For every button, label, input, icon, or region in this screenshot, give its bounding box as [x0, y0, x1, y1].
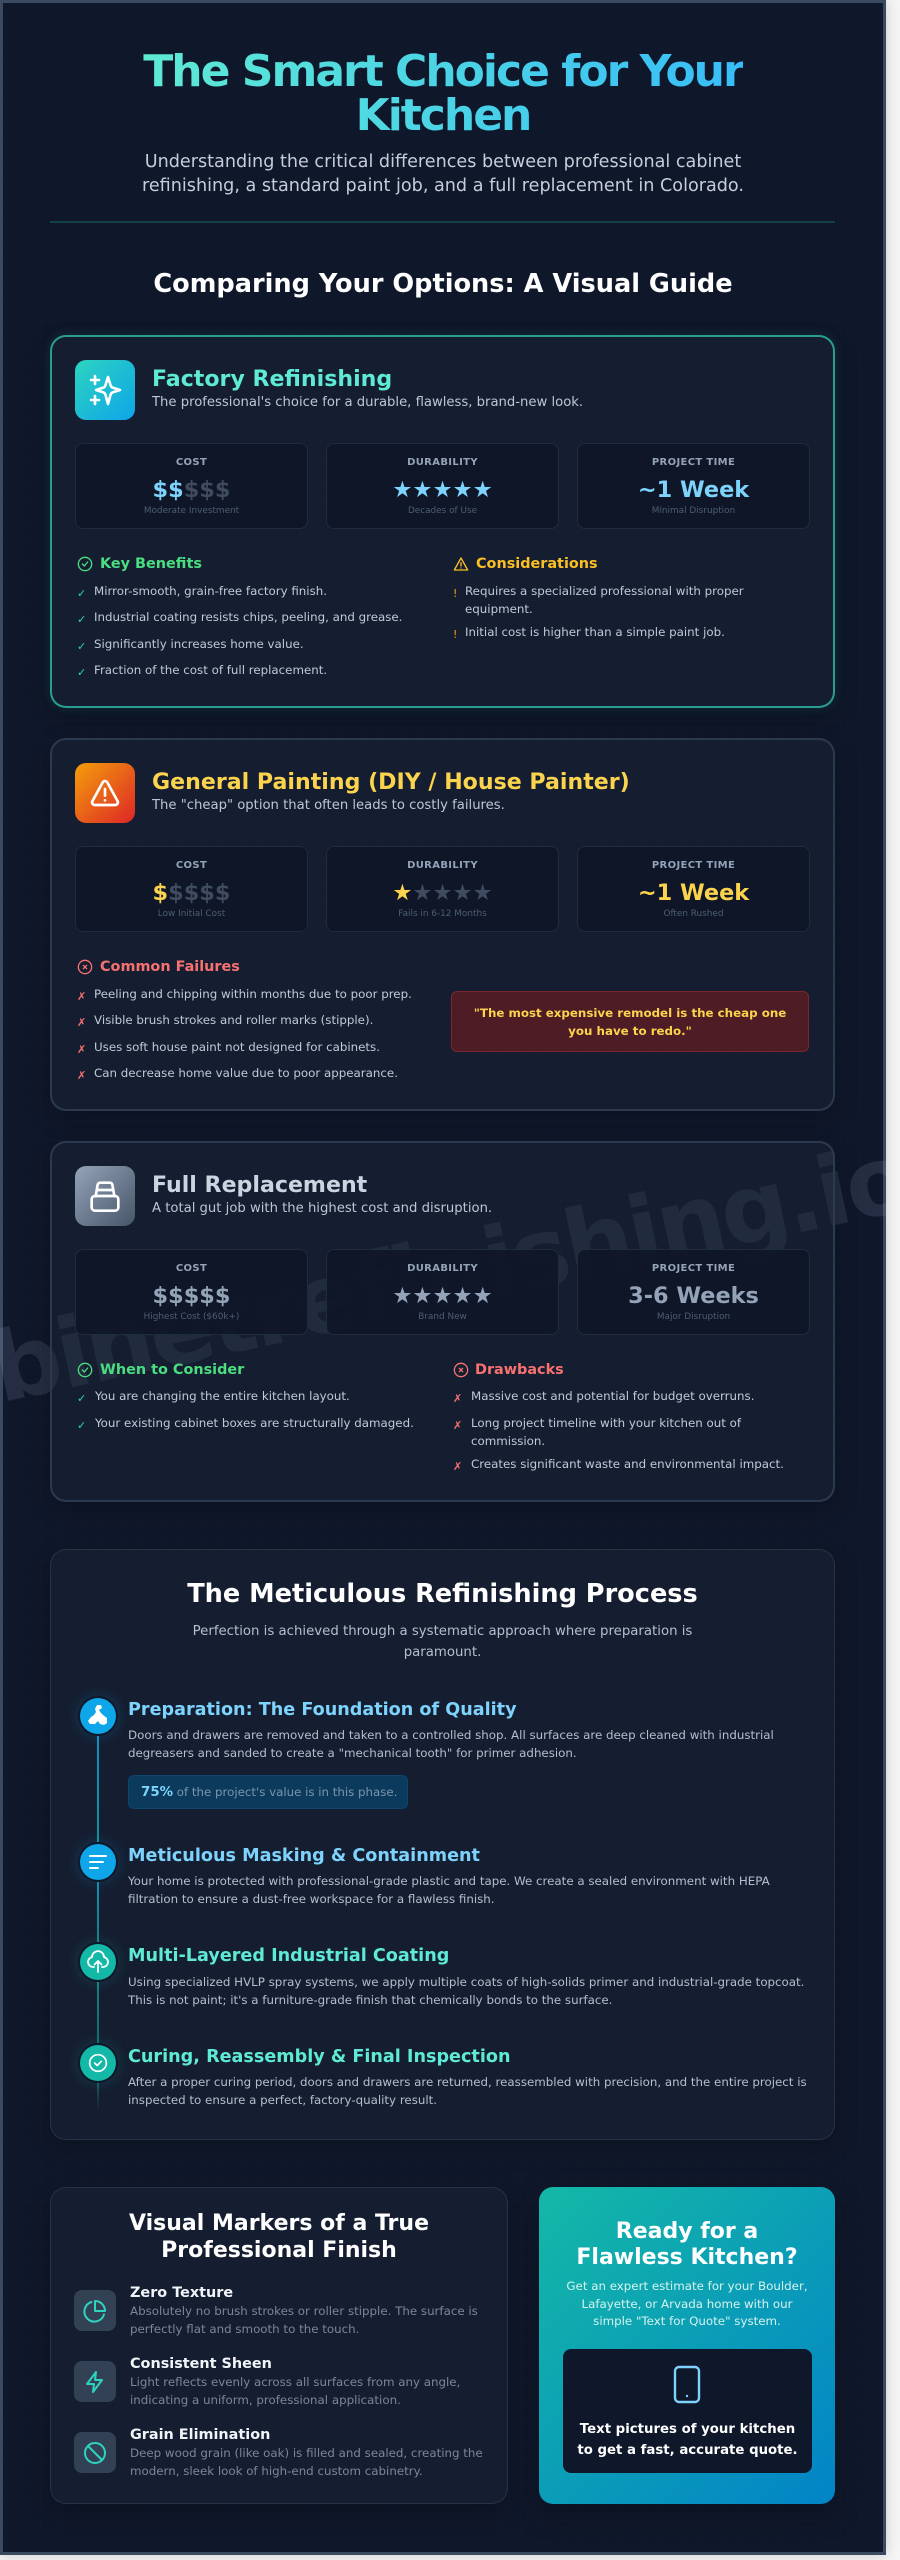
stat: durability: [326, 1249, 559, 1335]
marker: consistent sheen: [74, 2356, 460, 2407]
marker text: indicating a uniform, professional application.: [130, 2393, 401, 2407]
list: when to consider: ✓: [77, 1419, 86, 1432]
card title: Full Replacement: [152, 1172, 367, 1198]
stat: durability: [326, 443, 559, 529]
marker text: Light reflects evenly across all surfaces from any angle,: [130, 2375, 460, 2389]
step 3 title: Multi-Layered Industrial Coating: [128, 1946, 449, 1966]
list: common failures: [77, 987, 412, 1082]
step 3 text: [128, 1975, 804, 2007]
list: drawbacks: ✗: [453, 1392, 462, 1405]
stat: project time: [577, 1249, 810, 1335]
icon: pie chart: [74, 2290, 116, 2331]
section heading: Comparing Your Options: A Visual Guide: [153, 269, 733, 299]
panel: visual markers: [50, 2187, 508, 2504]
title: [143, 46, 743, 141]
stat: cost: COST: [176, 1263, 207, 1274]
stat: cost: [75, 846, 308, 932]
timeline connector 1: [97, 1736, 99, 1842]
cta text: simple "Text for Quote" system.: [593, 2314, 781, 2328]
markers heading: Professional Finish: [161, 2238, 397, 2263]
step 2 title: Meticulous Masking & Containment: [128, 1846, 480, 1866]
list: when to consider: [77, 1389, 414, 1432]
marker title: Grain Elimination: [130, 2427, 270, 2443]
list: considerations: [453, 584, 744, 641]
process intro: Perfection is achieved through a systematic approach where preparation is: [193, 1624, 692, 1639]
icon: jar: [75, 1166, 135, 1226]
heading: drawbacks: Drawbacks: [475, 1362, 564, 1378]
step 2 text: filtration to ensure a dust-free workspace for a flawless finish.: [128, 1892, 495, 1906]
stat: project time: 3-6 Weeks: [628, 1283, 759, 1309]
stat: cost: COST: [176, 860, 207, 871]
stat: project time: ~1 Week: [638, 880, 749, 906]
process intro: paramount.: [404, 1645, 481, 1660]
step 4 text: After a proper curing period, doors and drawers are returned, reassembled with precision, and the entire project is: [128, 2075, 807, 2089]
list: considerations: equipment.: [465, 602, 533, 616]
panel: refinishing process: [50, 1549, 835, 2140]
list: drawbacks: Creates significant waste and environmental impact.: [471, 1457, 784, 1471]
heading: when to consider: When to Consider: [100, 1362, 244, 1378]
cta text: [566, 2279, 808, 2328]
panel: factory refinishing: [50, 335, 835, 708]
stat: project time: PROJECT TIME: [652, 457, 735, 468]
list: key benefits: ✓: [77, 587, 86, 600]
stat: cost: $$$$$: [153, 1283, 230, 1309]
list: common failures: Visible brush strokes and roller marks (stipple).: [94, 1013, 373, 1027]
list: considerations: Requires a specialized professional with proper: [465, 584, 744, 598]
list: key benefits: Industrial coating resists chips, peeling, and grease.: [94, 610, 402, 624]
marker: zero texture: [74, 2285, 478, 2336]
timeline connector 2: [97, 1882, 99, 1943]
list: when to consider: Your existing cabinet boxes are structurally damaged.: [95, 1416, 414, 1430]
stat: project time: Minimal Disruption: [652, 506, 735, 516]
step 2 text: Your home is protected with professional-grade plastic and tape. We create a sealed environment with HEPA: [128, 1874, 770, 1888]
subtitle: [142, 152, 744, 196]
step 4 icon: [80, 2045, 116, 2081]
heading: common failures: Common Failures: [100, 959, 240, 975]
process heading: The Meticulous Refinishing Process: [187, 1579, 698, 1609]
stat: durability: [326, 846, 559, 932]
list: common failures: ✗: [77, 1043, 86, 1056]
stat: durability: ★★★★★: [392, 1283, 493, 1309]
timeline connector 3: [97, 1982, 99, 2044]
list: drawbacks: Massive cost and potential for budget overruns.: [471, 1389, 754, 1403]
list: considerations: !: [453, 628, 457, 641]
stat: durability: ★★★★★: [392, 880, 493, 906]
list: when to consider: You are changing the entire kitchen layout.: [95, 1389, 350, 1403]
stat: durability: Fails in 6-12 Months: [398, 909, 487, 919]
list: drawbacks: Long project timeline with your kitchen out of: [471, 1416, 741, 1430]
list: considerations: Initial cost is higher than a simple paint job.: [465, 625, 725, 639]
step 4 text: [128, 2075, 807, 2107]
step 1 icon: [80, 1698, 116, 1734]
step 1 badge: [128, 1775, 408, 1809]
card subtitle: The "cheap" option that often leads to costly failures.: [152, 798, 505, 813]
stat: project time: PROJECT TIME: [652, 860, 735, 871]
step 2 text: [128, 1874, 770, 1906]
icon: sparkles: [75, 360, 135, 420]
stat: cost: Moderate Investment: [144, 506, 239, 516]
stat: project time: ~1 Week: [638, 477, 749, 503]
marker text: [130, 2375, 460, 2407]
marker text: [130, 2446, 483, 2478]
card subtitle: A total gut job with the highest cost and disruption.: [152, 1201, 492, 1216]
list: key benefits: [77, 584, 402, 679]
step 1: [74, 1692, 774, 1809]
stat: project time: Major Disruption: [657, 1312, 730, 1322]
timeline connector 4: [97, 2083, 99, 2110]
marker title: Zero Texture: [130, 2285, 233, 2301]
stat: project time: [577, 846, 810, 932]
marker title: Consistent Sheen: [130, 2356, 272, 2372]
step 3: [75, 1939, 804, 2007]
callout: quote: you have to redo.": [568, 1024, 692, 1038]
cta heading: Flawless Kitchen?: [576, 2245, 798, 2270]
marker text: modern, sleek look of high-end custom cabinetry.: [130, 2464, 423, 2478]
cta heading: [576, 2219, 798, 2270]
markers heading: [129, 2211, 429, 2263]
title: Kitchen: [356, 90, 530, 141]
stat: project time: PROJECT TIME: [652, 1263, 735, 1274]
icon: lightning: [74, 2361, 116, 2402]
title: The Smart Choice for Your: [143, 46, 743, 97]
icon: ban: [74, 2432, 116, 2473]
list: common failures: ✗: [77, 990, 86, 1003]
cta box text: [577, 2422, 798, 2458]
step 3 icon: [80, 1944, 116, 1980]
marker text: Absolutely no brush strokes or roller stipple. The surface is: [130, 2304, 478, 2318]
stat: cost: [75, 443, 308, 529]
list: key benefits: Mirror-smooth, grain-free factory finish.: [94, 584, 327, 598]
cta box text: to get a fast, accurate quote.: [577, 2443, 798, 2458]
step 3 text: Using specialized HVLP spray systems, we apply multiple coats of high-solids primer and industrial-grade topcoat.: [128, 1975, 804, 1989]
stat: cost: COST: [176, 457, 207, 468]
markers heading: Visual Markers of a True: [129, 2211, 429, 2236]
step 1 badge: 75% of the project's value is in this phase.: [141, 1785, 397, 1800]
list: when to consider: ✓: [77, 1392, 86, 1405]
heading: considerations: Considerations: [476, 556, 598, 572]
marker text: Deep wood grain (like oak) is filled and sealed, creating the: [130, 2446, 483, 2460]
cta box text: Text pictures of your kitchen: [580, 2422, 795, 2437]
callout: quote: "The most expensive remodel is the cheap one: [474, 1006, 786, 1020]
panel: general painting: [50, 738, 835, 1111]
stat: durability: DURABILITY: [407, 457, 478, 468]
step 2: [74, 1838, 770, 1906]
cta quote box: [563, 2349, 812, 2473]
list: drawbacks: ✗: [453, 1419, 462, 1432]
marker text: perfectly flat and smooth to the touch.: [130, 2322, 359, 2336]
stat: durability: Brand New: [418, 1312, 467, 1322]
callout: quote: [451, 991, 809, 1052]
stat: durability: DURABILITY: [407, 1263, 478, 1274]
list: common failures: ✗: [77, 1016, 86, 1029]
stat: cost: $$$$$: [153, 477, 230, 503]
list: drawbacks: [453, 1389, 784, 1473]
step 4 title: Curing, Reassembly & Final Inspection: [128, 2047, 510, 2067]
list: key benefits: ✓: [77, 666, 86, 679]
step 4: [75, 2040, 807, 2107]
list: key benefits: ✓: [77, 613, 86, 626]
card subtitle: The professional's choice for a durable, flawless, brand-new look.: [152, 395, 583, 410]
cta heading: Ready for a: [616, 2219, 758, 2244]
list: common failures: Can decrease home value due to poor appearance.: [94, 1066, 398, 1080]
list: key benefits: Fraction of the cost of full replacement.: [94, 663, 327, 677]
icon: phone: [674, 2366, 700, 2404]
step 1 title: Preparation: The Foundation of Quality: [128, 1700, 517, 1720]
list: drawbacks: ✗: [453, 1460, 462, 1473]
stat: cost: Highest Cost ($60k+): [144, 1312, 239, 1322]
step 1 text: Doors and drawers are removed and taken to a controlled shop. All surfaces are deep cleaned with industrial: [128, 1728, 774, 1742]
list: considerations: !: [453, 587, 457, 600]
marker text: [130, 2304, 478, 2336]
marker: grain elimination: [74, 2427, 483, 2478]
icon: warning triangle: [75, 763, 135, 823]
subtitle: Understanding the critical differences between professional cabinet: [145, 152, 741, 172]
list: common failures: Peeling and chipping within months due to poor prep.: [94, 987, 412, 1001]
cta text: Get an expert estimate for your Boulder,: [566, 2279, 808, 2293]
list: key benefits: ✓: [77, 640, 86, 653]
subtitle: refinishing, a standard paint job, and a full replacement in Colorado.: [142, 176, 744, 196]
process intro: [193, 1624, 692, 1660]
heading: key benefits: Key Benefits: [100, 556, 202, 572]
step 1 text: [128, 1728, 774, 1760]
panel: call to action: [539, 2187, 835, 2504]
stat: durability: Decades of Use: [408, 506, 477, 516]
step 1 text: degreasers and sanded to create a "mechanical tooth" for primer adhesion.: [128, 1746, 577, 1760]
stat: cost: $$$$$: [153, 880, 230, 906]
panel: full replacement: [50, 1141, 835, 1502]
stat: project time: Often Rushed: [663, 909, 724, 919]
stat: durability: ★★★★★: [392, 477, 493, 503]
list: drawbacks: commission.: [471, 1434, 545, 1448]
stat: cost: [75, 1249, 308, 1335]
card title: General Painting (DIY / House Painter): [152, 769, 630, 795]
step 3 text: This is not paint; it's a furniture-grade finish that chemically bonds to the surface.: [128, 1993, 612, 2007]
step 2 icon: [80, 1844, 116, 1880]
stat: durability: DURABILITY: [407, 860, 478, 871]
stat: project time: [577, 443, 810, 529]
list: common failures: ✗: [77, 1069, 86, 1082]
card title: Factory Refinishing: [152, 366, 392, 392]
list: common failures: Uses soft house paint not designed for cabinets.: [94, 1040, 380, 1054]
cta text: Lafayette, or Arvada home with our: [582, 2297, 792, 2311]
step 4 text: inspected to ensure a perfect, factory-quality result.: [128, 2093, 437, 2107]
stat: cost: Low Initial Cost: [158, 909, 225, 919]
list: key benefits: Significantly increases home value.: [94, 637, 304, 651]
